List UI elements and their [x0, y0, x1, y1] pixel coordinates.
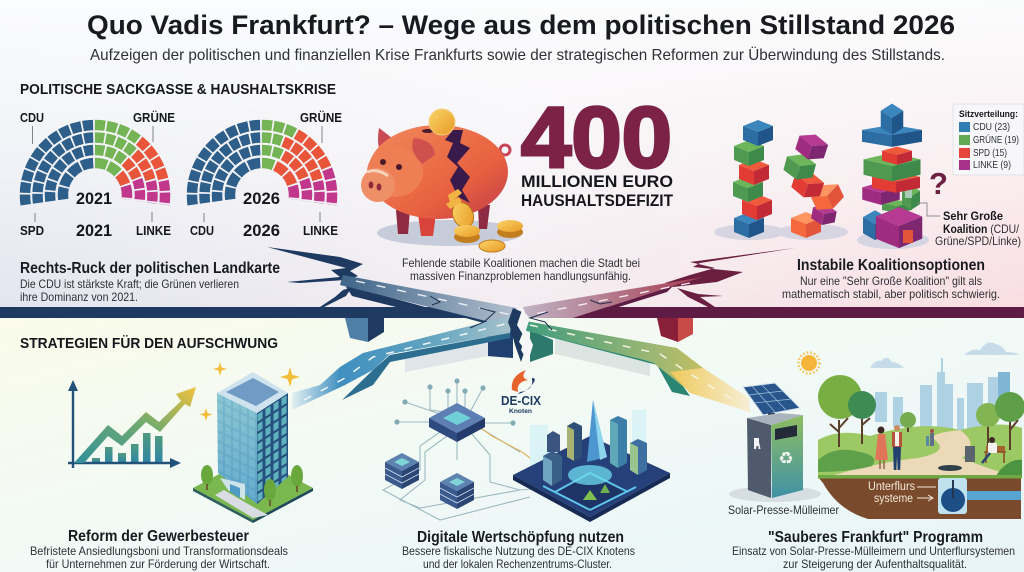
logo: DE-CIX: Knoten: [509, 408, 532, 415]
chart icon: rising arrow with bars: [68, 380, 196, 468]
text block: Digitale Wertschöpfung: Digitale Wertschöpfung nutzen: [417, 529, 624, 546]
divider bar right: [565, 307, 1024, 318]
parliament chart 2021: 2021: [76, 221, 112, 240]
label: Millionen Euro Haushaltsdefizit: [521, 172, 674, 210]
parliament chart 2026: [186, 110, 342, 236]
text block: Sauberes Frankfurt: "Sauberes Frankfurt" Programm: [768, 529, 983, 546]
icon: data center city: [513, 400, 670, 522]
heading: Strategien: STRATEGIEN FÜR DEN AUFSCHWUNG: [20, 335, 278, 352]
big number: 400: 400: [521, 90, 672, 186]
parliament chart 2021: LINKE: [136, 224, 171, 238]
text block: Rechts-Ruck: Rechts-Ruck der politischen Landkarte: [20, 260, 280, 277]
logo: DE-CIX: DE-CIX: [501, 393, 541, 408]
legend: Sitzverteilung: CDU (23): [973, 122, 1010, 133]
background: upper section: [0, 0, 1024, 310]
text block: Digitale Wertschöpfung: Bessere fiskalische Nutzung des DE-CIX Knotens: [402, 544, 635, 558]
parliament chart 2026: LINKE: [303, 224, 338, 238]
parliament chart 2021: [20, 110, 175, 236]
icon: clouds: [870, 342, 1020, 368]
crack: right lightning: [665, 248, 795, 307]
text block: Reform der Gewerbesteuer: Reform der Gewerbesteuer: [68, 528, 249, 545]
parliament chart 2021: CDU: [20, 111, 44, 125]
illustration: park scene with skyline: systeme: [874, 493, 913, 505]
text block: Digitale Wertschöpfung: und der lokalen Rechenzentrums-Cluster.: [423, 557, 612, 571]
icon: sparkles: [200, 362, 300, 421]
crack: left lightning: [267, 247, 363, 308]
icon: server stack right: [440, 473, 474, 509]
text block: Sauberes Frankfurt: [732, 529, 1015, 571]
text block: Rechts-Ruck: [20, 260, 280, 304]
pillars upper bridge: [345, 318, 693, 342]
parliament chart 2021: GRÜNE: [133, 110, 175, 125]
legend: Sitzverteilung: [953, 104, 1024, 175]
parliament chart 2026: CDU: [190, 224, 214, 238]
label: Solar-Presse-Mülleimer: Solar-Presse-Mülleimer: [728, 503, 839, 517]
illustration: park scene with skyline: Unterflurs: [868, 481, 915, 493]
parliament chart 2026: 2026: [243, 189, 280, 208]
legend: Sitzverteilung: SPD (15): [973, 148, 1007, 159]
icon: block tower stable: [714, 120, 786, 240]
network diagram: DE-CIX switch and wires: [383, 378, 545, 520]
callout: Sehr Große Koalition: [917, 203, 1021, 248]
parliament chart 2021: 2021: [76, 189, 112, 208]
road: lower right rising: [520, 320, 750, 412]
text block: Instabile Koalitionsoptionen: Instabile Koalitionsoptionen: [797, 257, 985, 274]
divider bar left: [0, 307, 490, 318]
label: Millionen Euro Haushaltsdefizit: HAUSHALTSDEFIZIT: [521, 191, 674, 210]
text block: Reform der Gewerbesteuer: [30, 528, 288, 571]
text block: Rechts-Ruck: Die CDU ist stärkste Kraft; die Grünen verlieren: [20, 277, 239, 291]
text block: Fehlende Koalitionen: massiven Finanzproblemen handlungsunfähig.: [410, 269, 631, 283]
illustration: park scene with skyline: [818, 358, 1024, 519]
text block: Sauberes Frankfurt: zur Steigerung der Aufenthaltsqualität.: [783, 557, 967, 571]
icon: server stack left: [385, 453, 419, 489]
callout: Sehr Große Koalition: Sehr Große: [943, 209, 1003, 223]
legend: Sitzverteilung: Sitzverteilung:: [959, 109, 1018, 120]
text block: Fehlende Koalitionen: Fehlende stabile Koalitionen machen die Stadt bei: [402, 256, 640, 270]
road: upper right cracked: [523, 277, 703, 318]
title: Quo Vadis Frankfurt? – Wege aus dem politischen Stillstand 2026: [87, 10, 955, 40]
parliament chart 2021: SPD: [20, 224, 44, 238]
text block: Reform der Gewerbesteuer: Befristete Ansiedlungsboni und Transformationsdeals: [30, 544, 288, 558]
question mark: ?: [929, 166, 948, 201]
text block: Instabile Koalitionsoptionen: Nur eine "Sehr Große Koalition" gilt als: [800, 274, 982, 288]
callout: Sehr Große Koalition: Koalition (CDU/: [943, 222, 1020, 236]
road: upper left cracked: [340, 275, 517, 325]
icon: block tower grand coalition: [857, 104, 929, 249]
road: lower left rising: [292, 315, 513, 410]
icon: sun: [798, 352, 820, 374]
crack: center fissure: [430, 296, 612, 362]
icon: office building: [193, 372, 313, 523]
icon: block tower collapsing: [776, 130, 848, 240]
heading: politische Sackgasse: POLITISCHE SACKGASSE & HAUSHALTSKRISE: [20, 82, 336, 98]
text block: Instabile Koalitionsoptionen: mathematisch stabil, aber politisch schwierig.: [782, 287, 1000, 301]
pillars lower bridge: [405, 325, 650, 376]
text block: Rechts-Ruck: ihre Dominanz von 2021.: [20, 290, 138, 304]
text block: Reform der Gewerbesteuer: für Unternehmen zur Förderung der Wirtschaft.: [46, 557, 270, 571]
icon: solar compactor bin: [729, 383, 821, 502]
label: Millionen Euro Haushaltsdefizit: MILLIONEN EURO: [521, 172, 673, 191]
icon: solar compactor bin: ♻: [778, 449, 794, 469]
text block: Digitale Wertschöpfung: [402, 529, 635, 571]
legend: Sitzverteilung: LINKE (9): [973, 160, 1011, 171]
parliament chart 2026: 2026: [243, 221, 280, 240]
subtitle: Aufzeigen der politischen und finanziellen Krise Frankfurts sowie der strategischen Reformen zur Überwindung des Stillstands.: [90, 46, 945, 64]
text block: Fehlende Koalitionen: [402, 256, 640, 283]
icon: cracked piggy bank: [361, 109, 523, 252]
parliament chart 2026: GRÜNE: [300, 110, 342, 125]
logo: DE-CIX: [501, 370, 541, 415]
background: lower section: [0, 316, 1024, 572]
text block: Instabile Koalitionsoptionen: [782, 257, 1000, 301]
